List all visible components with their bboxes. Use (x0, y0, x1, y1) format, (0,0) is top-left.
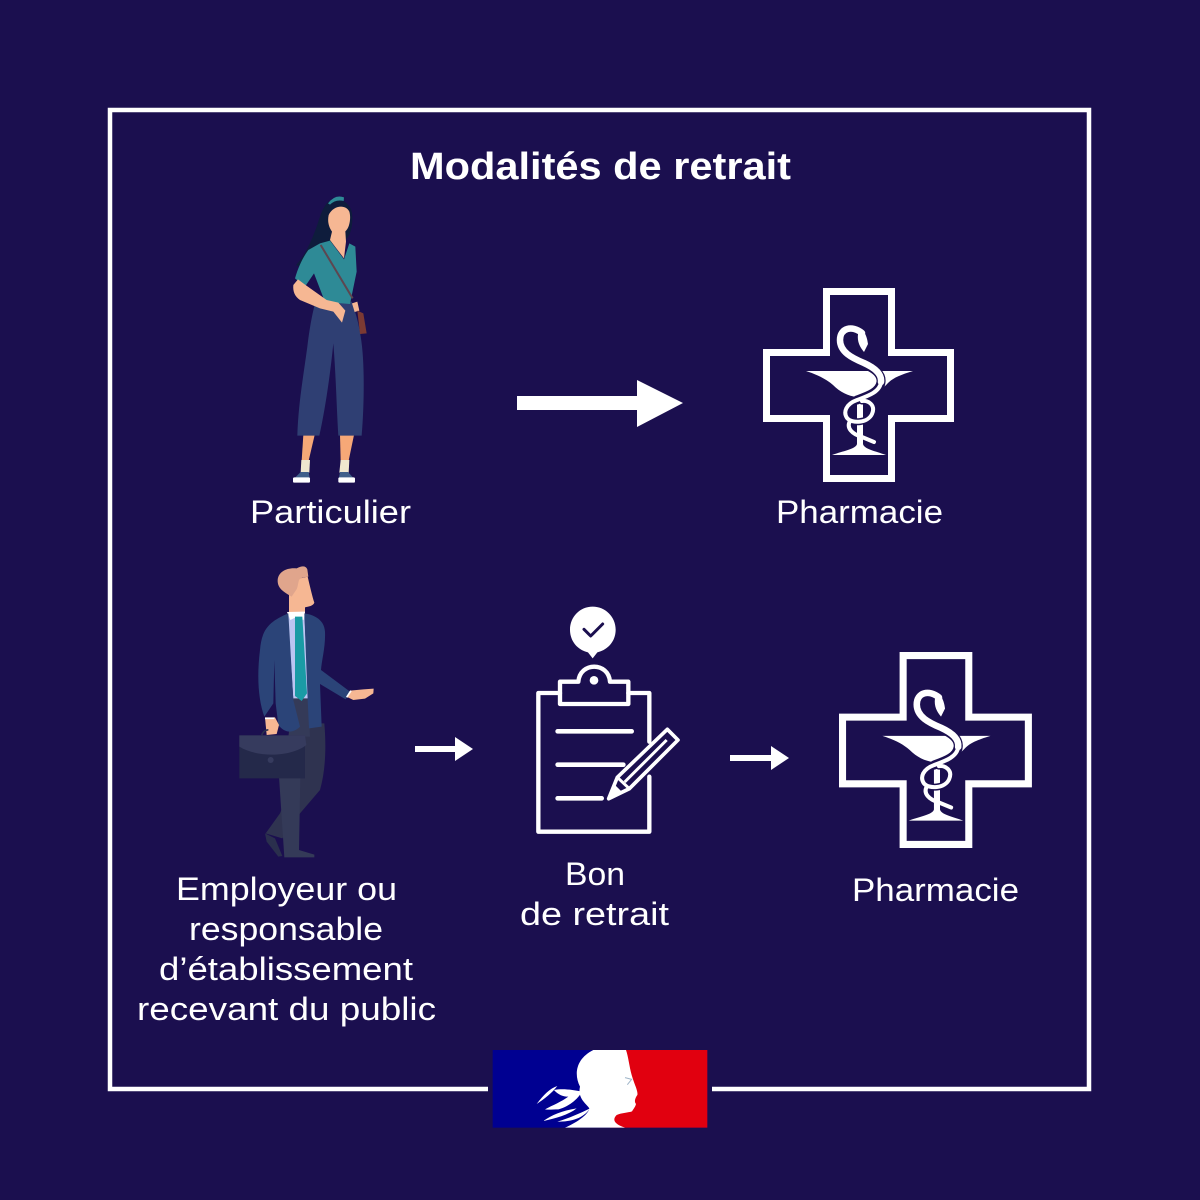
label: particulier: Particulier (250, 494, 411, 530)
label: employeur: Employeur ou (176, 871, 397, 907)
logo: République française (493, 1050, 707, 1128)
label: employeur (137, 871, 436, 1027)
check bubble (570, 607, 616, 658)
label: bon de retrait (520, 856, 669, 932)
frame (110, 110, 1089, 1089)
bowl and stem (806, 371, 913, 455)
icon: businessman (employeur) (239, 566, 374, 857)
title: Modalités de retrait (410, 146, 791, 188)
pencil (609, 729, 678, 799)
icon: pharmacy cross (766, 292, 950, 478)
label: bon de retrait: de retrait (520, 896, 669, 932)
label: employeur: d’établissement (159, 951, 413, 987)
label: employeur: responsable (189, 911, 383, 947)
arrow: particulier to pharmacie (517, 380, 683, 427)
icon: pharmacy cross (second) (843, 656, 1028, 844)
icon: woman (particulier) (293, 196, 367, 483)
label: pharmacie: Pharmacie (776, 494, 943, 530)
arrow: employeur to bon (415, 737, 473, 761)
snake (840, 329, 881, 442)
label: bon de retrait: Bon (565, 856, 625, 892)
icon: clipboard with check and pencil (538, 607, 678, 832)
label: employeur: recevant du public (137, 991, 436, 1027)
arrow: bon to pharmacie (730, 746, 789, 770)
label: pharmacie (second): Pharmacie (852, 872, 1019, 908)
